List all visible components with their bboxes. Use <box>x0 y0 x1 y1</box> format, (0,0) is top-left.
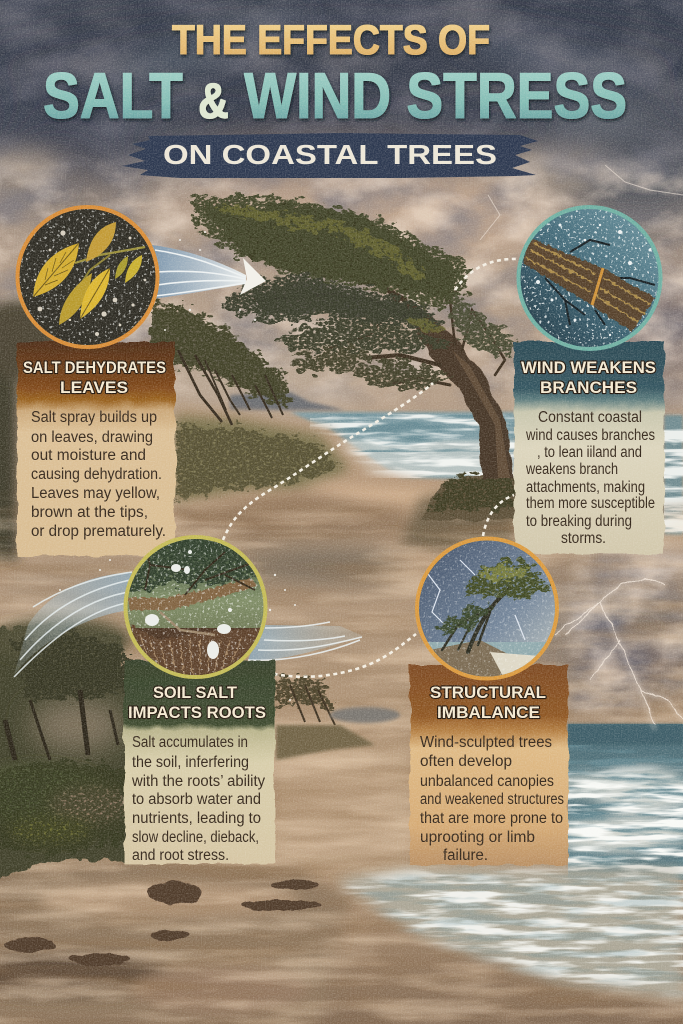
panel body text: with the roots’ ability <box>131 773 265 790</box>
panel body text: Wind-sculpted trees <box>420 734 552 751</box>
panel body text: weakens branch <box>525 461 618 478</box>
panel heading <box>23 359 166 397</box>
panel heading: WIND WEAKENS <box>521 359 656 377</box>
panel body text: and weakened structures <box>420 791 564 808</box>
panel body text: wind causes branches <box>525 427 655 444</box>
panel body text: causing dehydration. <box>31 466 162 483</box>
panel heading: STRUCTURAL <box>430 684 546 702</box>
sand streak texture <box>0 490 683 1024</box>
salt dust drifting around the tree <box>59 231 296 701</box>
panel body text: attachments, making <box>526 479 645 496</box>
wind streaks right of soil circle <box>248 622 363 660</box>
panel body text: them more susceptible <box>526 495 655 512</box>
panel heading: BRANCHES <box>540 379 637 397</box>
trunk and limbs <box>255 262 514 480</box>
panel heading: IMPACTS ROOTS <box>128 704 266 722</box>
dune shrubs and sand mid ground <box>0 405 514 610</box>
subtitle brush banner <box>122 133 538 178</box>
panel body text: nutrients, leading to <box>132 810 261 827</box>
subtitle brush banner: ON COASTAL TREES <box>163 139 497 170</box>
cloud mottling <box>0 0 683 725</box>
panel: salt dehydrates leaves <box>15 205 175 556</box>
panel body text: the soil, inferfering <box>132 754 249 771</box>
trees right of soil panel <box>276 675 400 760</box>
panel body text: Leaves may yellow, <box>31 485 160 502</box>
wind arrow toward tree <box>152 245 266 299</box>
panel body text: to breaking during <box>526 513 632 530</box>
panel body text: Constant coastal <box>538 409 642 426</box>
panel background <box>514 342 664 554</box>
icon: salted roots in circle <box>120 537 270 680</box>
panel body text: or drop prematurely. <box>31 523 166 540</box>
canopy highlights <box>219 203 444 336</box>
left forest <box>0 618 135 880</box>
icon: wind-sculpted tree in circle <box>417 538 560 680</box>
panel body text <box>131 734 265 864</box>
panel heading <box>521 359 656 397</box>
left edge dark foliage <box>0 300 60 560</box>
panel body text: on leaves, drawing <box>31 429 153 446</box>
panel heading: IMBALANCE <box>437 704 540 722</box>
title line: The Effects Of: THE EFFECTS OF <box>172 16 490 63</box>
panel heading <box>128 684 266 722</box>
panel heading: SALT DEHYDRATES <box>23 359 166 377</box>
panel body text: and root stress. <box>132 847 229 864</box>
panel body text: out moisture and <box>31 447 146 464</box>
foreground sand <box>0 745 410 1024</box>
panel background <box>410 665 568 865</box>
panel heading: SOIL SALT <box>153 684 237 702</box>
sea behind tree <box>290 412 683 535</box>
panel body text: , to lean iiland and <box>537 444 642 461</box>
title block <box>43 16 627 178</box>
panel body text: brown at the tips, <box>31 504 148 521</box>
panel body text: uprooting or limb <box>420 829 535 846</box>
panel: wind weakens branches <box>514 205 665 554</box>
tree line behind salt panel <box>150 300 290 425</box>
dotted connector lines <box>223 259 520 677</box>
panel body text <box>420 734 564 864</box>
panel body text <box>31 409 166 540</box>
title line: Salt & Wind Stress: SALT & WIND STRESS <box>43 59 627 132</box>
canopy foliage <box>190 195 515 390</box>
panel heading <box>430 684 546 722</box>
icon: yellowing leaves in circle <box>15 205 160 350</box>
panel body text: that are more prone to <box>420 810 563 827</box>
distant headland <box>230 392 345 410</box>
panel: structural imbalance <box>410 538 568 865</box>
panel: soil salt impacts roots <box>120 537 275 864</box>
panel body text: often develop <box>420 753 512 770</box>
panel background <box>17 342 175 556</box>
ocean waves <box>320 724 683 1005</box>
lightning bolts <box>480 165 683 730</box>
shoreline rocks <box>5 856 320 966</box>
icon: cracked branch in circle <box>515 205 665 355</box>
panel body text: Salt spray builds up <box>31 409 157 426</box>
panel body text: to absorb water and <box>132 791 261 808</box>
panel background <box>124 660 275 864</box>
ground mound <box>420 470 514 520</box>
panel body text: unbalanced canopies <box>420 773 554 790</box>
panel body text: storms. <box>561 530 606 547</box>
main wind-bent tree <box>190 195 515 520</box>
storm clouds <box>0 0 683 700</box>
wind streaks left of soil circle <box>14 572 132 677</box>
panel body text: failure. <box>443 847 488 864</box>
panel body text: slow decline, dieback, <box>132 829 259 846</box>
panel body text <box>525 409 655 547</box>
panel heading: LEAVES <box>60 379 128 397</box>
panel body text: Salt accumulates in <box>132 734 248 751</box>
